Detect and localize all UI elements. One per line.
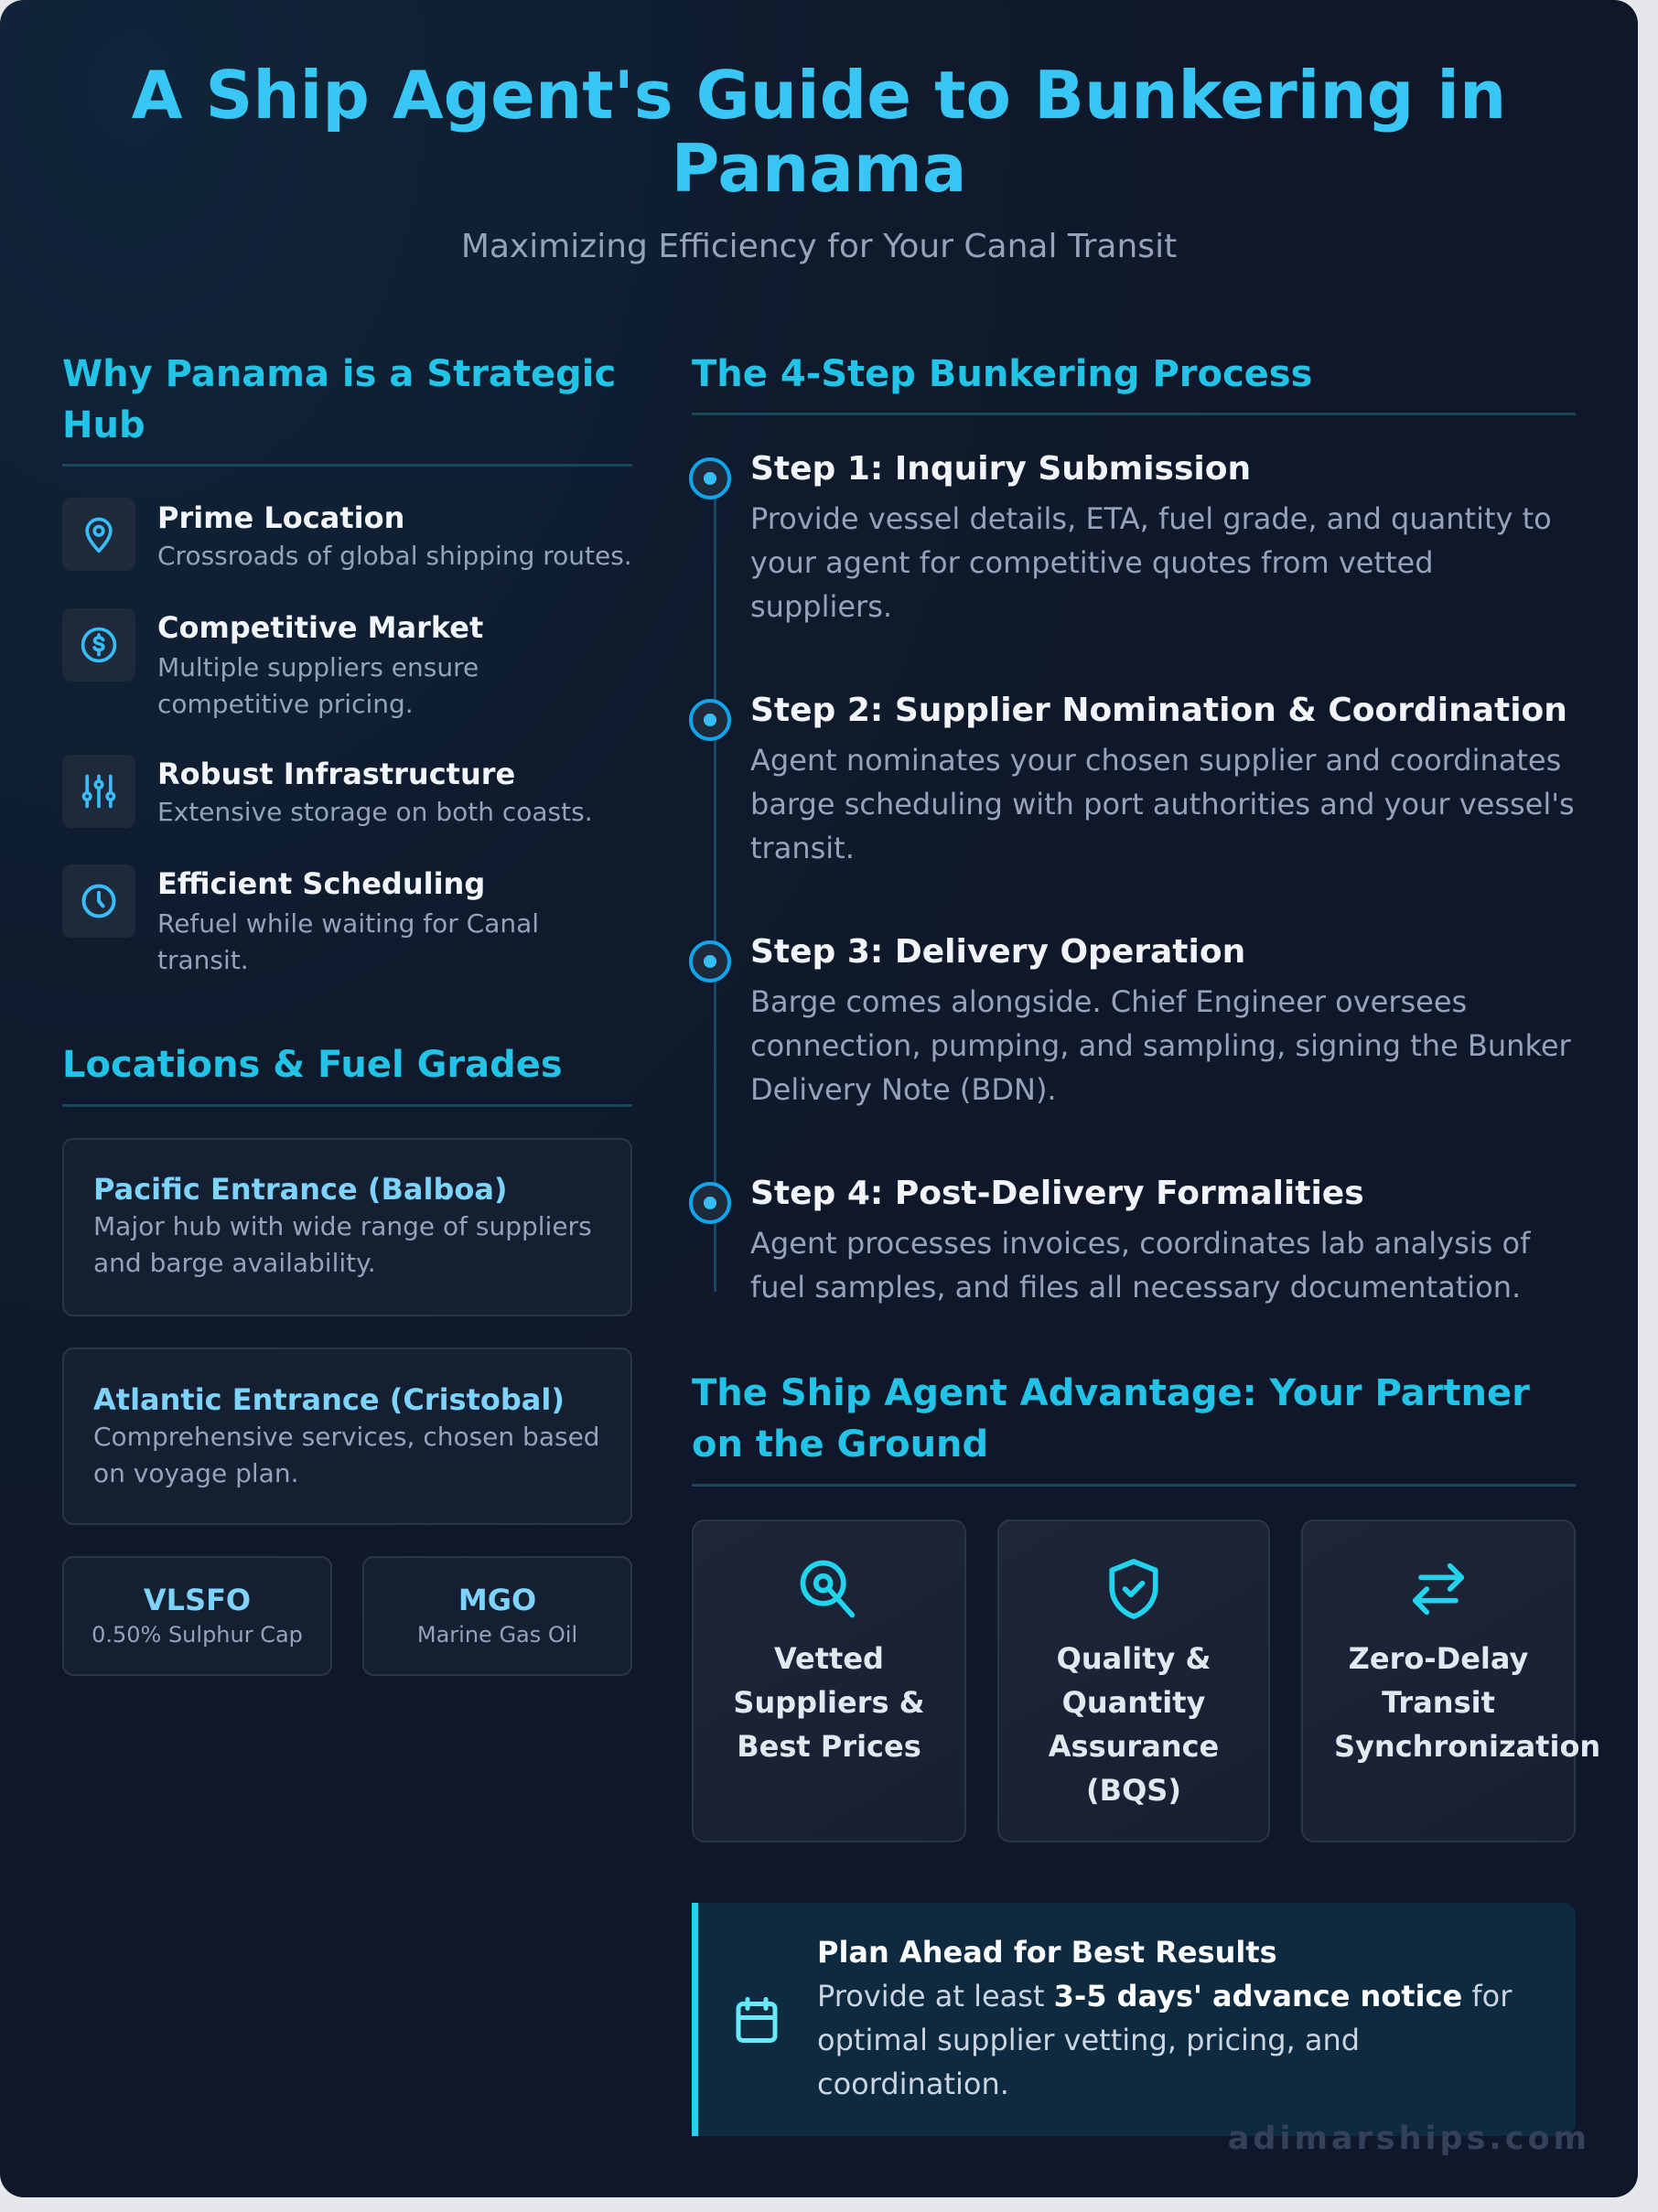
step 1	[689, 450, 1552, 624]
step 4: Agent processes invoices, coordinates lab analysis of fuel samples, and files all necessary documentation.	[750, 1226, 1530, 1305]
card: zero-delay: Synchronization	[1334, 1729, 1600, 1764]
box: MGO	[362, 1556, 632, 1676]
box: MGO: MGO	[458, 1583, 536, 1617]
text: efficient scheduling	[157, 866, 539, 975]
box: pacific	[62, 1138, 632, 1316]
icon: location pin	[62, 498, 135, 571]
heading: ship agent advantage: The Ship Agent Advantage: Your Partner on the Ground	[692, 1372, 1530, 1466]
text: prime location	[157, 500, 632, 571]
card: vetted suppliers: Vetted	[774, 1641, 884, 1676]
box: atlantic: Atlantic Entrance (Cristobal)	[93, 1382, 565, 1417]
card: quality assurance: (BQS)	[1086, 1773, 1181, 1808]
heading: locations: Locations & Fuel Grades	[62, 1044, 563, 1086]
title: A Ship Agent's Guide to Bunkering in	[132, 57, 1506, 134]
step 4: Step 4: Post-Delivery Formalities	[750, 1175, 1364, 1212]
card: quality assurance: Quantity	[1062, 1685, 1205, 1720]
item: efficient scheduling: Refuel while waiting for Canal transit.	[157, 908, 539, 975]
item: prime location: Crossroads of global shipping routes.	[157, 541, 632, 571]
heading: why panama: Why Panama is a Strategic Hub	[62, 353, 616, 446]
icon: dollar	[62, 608, 135, 682]
step 2: Step 2: Supplier Nomination & Coordination	[750, 692, 1567, 729]
timeline	[714, 499, 716, 1292]
step 4	[689, 1175, 1531, 1305]
card: quality assurance: Assurance	[1049, 1729, 1219, 1764]
step 3: Barge comes alongside. Chief Engineer oversees connection, pumping, and sampling, signing the Bunker Delivery Note (BDN).	[750, 984, 1571, 1107]
item: competitive market	[62, 608, 483, 719]
icon: shield	[1109, 1559, 1158, 1619]
item: robust infrastructure	[62, 755, 593, 828]
card: quality assurance	[997, 1519, 1270, 1842]
box: VLSFO	[62, 1556, 332, 1676]
icon: calendar	[736, 1997, 778, 2043]
card: vetted suppliers: Suppliers &	[733, 1685, 925, 1720]
card: zero-delay	[1301, 1519, 1576, 1842]
text: robust infrastructure	[157, 757, 593, 827]
item: robust infrastructure: Robust Infrastructure	[157, 757, 515, 791]
card: vetted suppliers	[692, 1519, 966, 1842]
icon: clock	[62, 864, 135, 938]
title	[132, 57, 1506, 207]
box: VLSFO: VLSFO	[144, 1583, 251, 1617]
icon: sliders	[62, 755, 135, 828]
item: prime location: Prime Location	[157, 500, 404, 535]
icon: search	[800, 1561, 855, 1617]
box: MGO: Marine Gas Oil	[417, 1622, 577, 1648]
callout text: Provide at least 3-5 days' advance notice for optimal supplier vetting, pricing, and coordination.	[817, 1979, 1512, 2101]
card: vetted suppliers: Best Prices	[737, 1729, 921, 1764]
item: efficient scheduling: Efficient Scheduling	[157, 866, 485, 901]
subtitle: Maximizing Efficiency for Your Canal Transit	[461, 228, 1177, 265]
icon: arrows	[1413, 1562, 1464, 1616]
watermark: adimarships.com	[1228, 2121, 1590, 2157]
step 1: Provide vessel details, ETA, fuel grade, and quantity to your agent for competitive quotes from vetted suppliers.	[750, 501, 1552, 624]
item: competitive market: Competitive Market	[157, 610, 483, 645]
box: atlantic: Comprehensive services, chosen based on voyage plan.	[93, 1422, 600, 1488]
card: zero-delay: Zero-Delay	[1349, 1641, 1528, 1676]
step 2	[689, 692, 1575, 865]
item: prime location	[62, 498, 632, 571]
callout: plan ahead	[692, 1903, 1576, 2136]
card: quality assurance: Quality &	[1057, 1641, 1211, 1676]
item: competitive market: Multiple suppliers ensure competitive pricing.	[157, 652, 479, 719]
step 3	[689, 933, 1571, 1107]
step 3: Step 3: Delivery Operation	[750, 933, 1245, 971]
step 1: Step 1: Inquiry Submission	[750, 450, 1251, 488]
box: VLSFO: 0.50% Sulphur Cap	[92, 1622, 303, 1648]
text: competitive market	[157, 610, 483, 719]
item: robust infrastructure: Extensive storage on both coasts.	[157, 797, 593, 827]
box: pacific: Major hub with wide range of suppliers and barge availability.	[93, 1211, 592, 1278]
card: zero-delay: Transit	[1382, 1685, 1495, 1720]
box: pacific: Pacific Entrance (Balboa)	[93, 1172, 508, 1207]
box: atlantic	[62, 1348, 632, 1525]
step 2: Agent nominates your chosen supplier and coordinates barge scheduling with port authorities and your vessel's transit.	[750, 743, 1575, 865]
item: efficient scheduling	[62, 864, 539, 975]
heading: 4-step process: The 4-Step Bunkering Process	[692, 353, 1312, 395]
title: Panama	[672, 130, 966, 207]
callout text: Plan Ahead for Best Results	[817, 1935, 1277, 1970]
